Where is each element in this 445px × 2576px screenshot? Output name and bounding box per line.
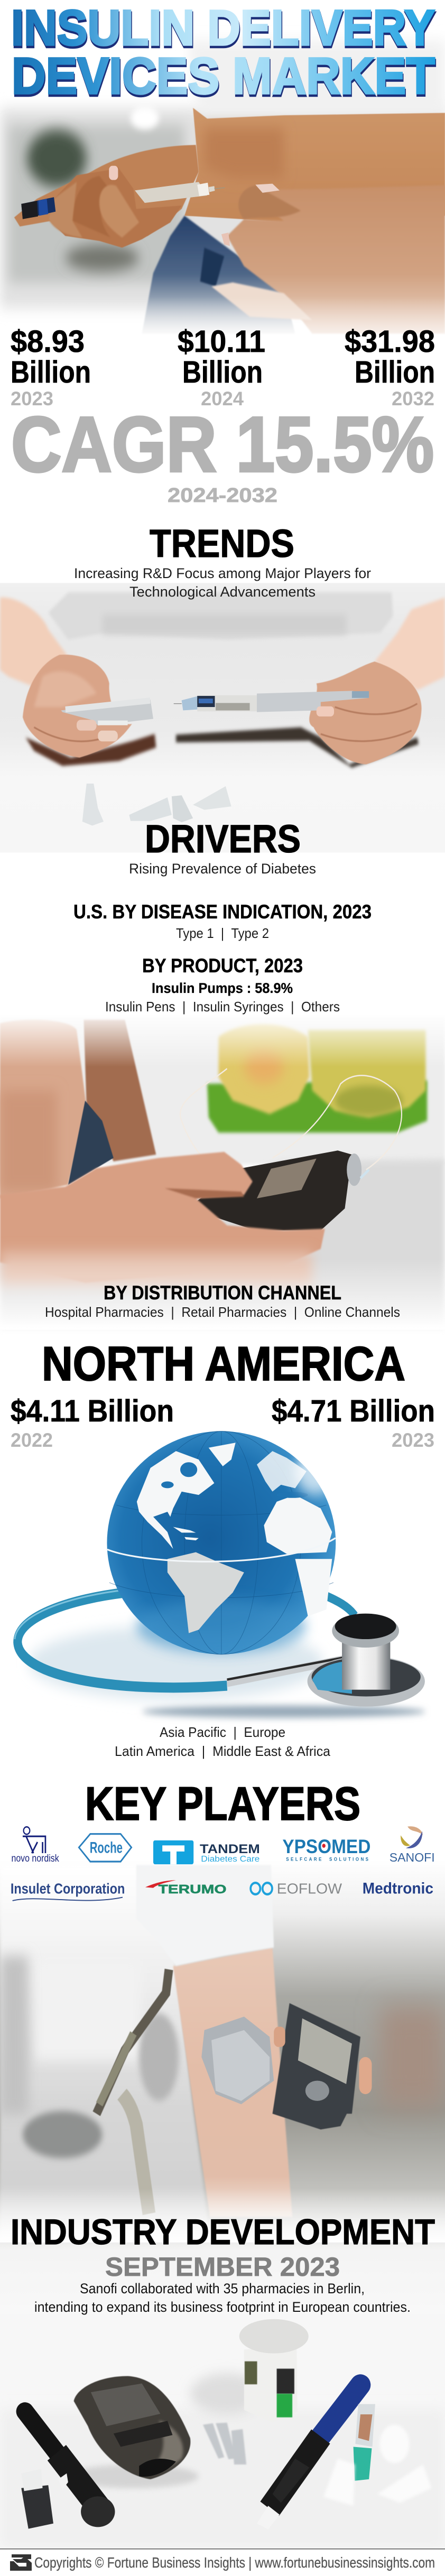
segment: by product xyxy=(105,955,340,1015)
trends photo: two hands with pen xyxy=(0,583,445,853)
trends heading: TRENDS xyxy=(150,522,294,565)
stat: 2023 market size xyxy=(11,324,91,410)
pump photo: insulin pump in hand xyxy=(0,1010,445,1330)
insulin pen xyxy=(257,2385,360,2529)
other regions list xyxy=(115,1724,331,1759)
test strips xyxy=(203,2423,246,2465)
logo: Insulet Corporation: Insulet Corporation xyxy=(11,1881,125,1897)
stat: 2024 market size: Billion xyxy=(182,355,263,389)
trends description: Technological Advancements xyxy=(129,584,316,600)
test strip vial xyxy=(239,2319,309,2423)
logo: Ypsomed: YPSOMED xyxy=(282,1836,370,1858)
segment: by product: Insulin Pumps : 58.9% xyxy=(152,980,293,996)
globe xyxy=(107,1431,336,1654)
development date: SEPTEMBER 2023 xyxy=(105,2252,340,2282)
logo: EOFLOW xyxy=(251,1881,342,1897)
trends description: Increasing R&D Focus among Major Players for xyxy=(74,565,371,581)
stat: 2032 market size xyxy=(345,324,435,410)
glucose meter xyxy=(74,2376,190,2479)
development description xyxy=(34,2281,411,2315)
other regions list: Latin America | Middle East & Africa xyxy=(115,1743,331,1759)
segment: by distribution channel: BY DISTRIBUTION CHANNEL xyxy=(104,1282,341,1304)
stat: 2023 market size: $8.93 xyxy=(11,324,85,359)
insulin cartridge xyxy=(354,2404,375,2481)
stat: north america 2022: 2022 xyxy=(11,1429,53,1451)
logo: Sanofi xyxy=(390,1826,435,1864)
key players heading: KEY PLAYERS xyxy=(85,1777,360,1830)
trends description xyxy=(74,565,371,600)
development description: intending to expand its business footprint in European countries. xyxy=(34,2299,411,2315)
person wearing insulin pod photo xyxy=(0,1860,445,2314)
other regions list: Asia Pacific | Europe xyxy=(160,1724,285,1740)
logo: novo nordisk: novo nordisk xyxy=(11,1853,59,1864)
stat: 2024 market size: 2024 xyxy=(201,388,244,410)
north america heading: NORTH AMERICA xyxy=(42,1337,405,1391)
drivers heading: DRIVERS xyxy=(145,817,301,861)
logo: Roche xyxy=(79,1834,132,1862)
stat: 2024 market size xyxy=(178,324,265,410)
logo: Tandem Diabetes Care: Diabetes Care xyxy=(201,1855,259,1864)
drivers description: Rising Prevalence of Diabetes xyxy=(129,861,316,877)
footer xyxy=(0,2549,445,2576)
CAGR period: 2024-2032 xyxy=(168,485,277,507)
segment: by distribution channel: Hospital Pharmacies | Retail Pharmacies | Online Channels xyxy=(45,1304,400,1320)
stat: north america 2022: $4.11 Billion xyxy=(11,1394,174,1428)
stat: north america 2023: 2023 xyxy=(392,1429,434,1451)
development description: Sanofi collaborated with 35 pharmacies in Berlin, xyxy=(80,2281,365,2296)
diabetes kit photo: meter, lancet, vial, pen xyxy=(0,2314,445,2549)
stethoscope chest piece xyxy=(308,1614,425,1707)
segment: disease indication xyxy=(73,901,372,941)
logo: Ypsomed: SELFCARE SOLUTIONS xyxy=(286,1856,368,1862)
segment: disease indication: U.S. BY DISEASE INDICATION, 2023 xyxy=(73,901,372,923)
stethoscope tube xyxy=(15,1590,355,1688)
footer logo xyxy=(10,2554,32,2571)
segment: by distribution channel xyxy=(45,1282,400,1320)
segment: by product: Insulin Pens | Insulin Syringes | Others xyxy=(105,999,340,1015)
segment: disease indication: Type 1 | Type 2 xyxy=(176,925,269,941)
logo: EOFLOW: EOFLOW xyxy=(277,1881,342,1897)
segment: by product: BY PRODUCT, 2023 xyxy=(142,955,303,977)
pen in hand xyxy=(21,182,225,219)
title xyxy=(11,0,435,107)
logo: Sanofi: SANOFI xyxy=(390,1852,435,1864)
stat: 2023 market size: Billion xyxy=(11,355,91,389)
stat: north america 2022 xyxy=(11,1394,174,1451)
lancing device xyxy=(21,2412,115,2529)
logo: Tandem Diabetes Care xyxy=(153,1840,260,1864)
stat: 2024 market size: $10.11 xyxy=(178,324,265,359)
hero photo: insulin pen injection xyxy=(0,41,445,357)
logo: Terumo xyxy=(145,1880,227,1896)
stat: north america 2023 xyxy=(272,1394,435,1451)
logo: Tandem Diabetes Care: TANDEM xyxy=(200,1842,260,1856)
logo: novo nordisk xyxy=(11,1827,59,1864)
needle caps xyxy=(323,2425,431,2506)
stat: 2023 market size: 2023 xyxy=(11,388,53,410)
stethoscope and globe illustration xyxy=(15,1431,425,1718)
stat: 2032 market size: $31.98 xyxy=(345,324,435,359)
logo: Terumo: TERUMO xyxy=(159,1883,227,1896)
logo: Medtronic: Medtronic xyxy=(363,1880,433,1897)
logo: Roche: Roche xyxy=(90,1838,123,1856)
stat: 2032 market size: 2032 xyxy=(392,388,434,410)
